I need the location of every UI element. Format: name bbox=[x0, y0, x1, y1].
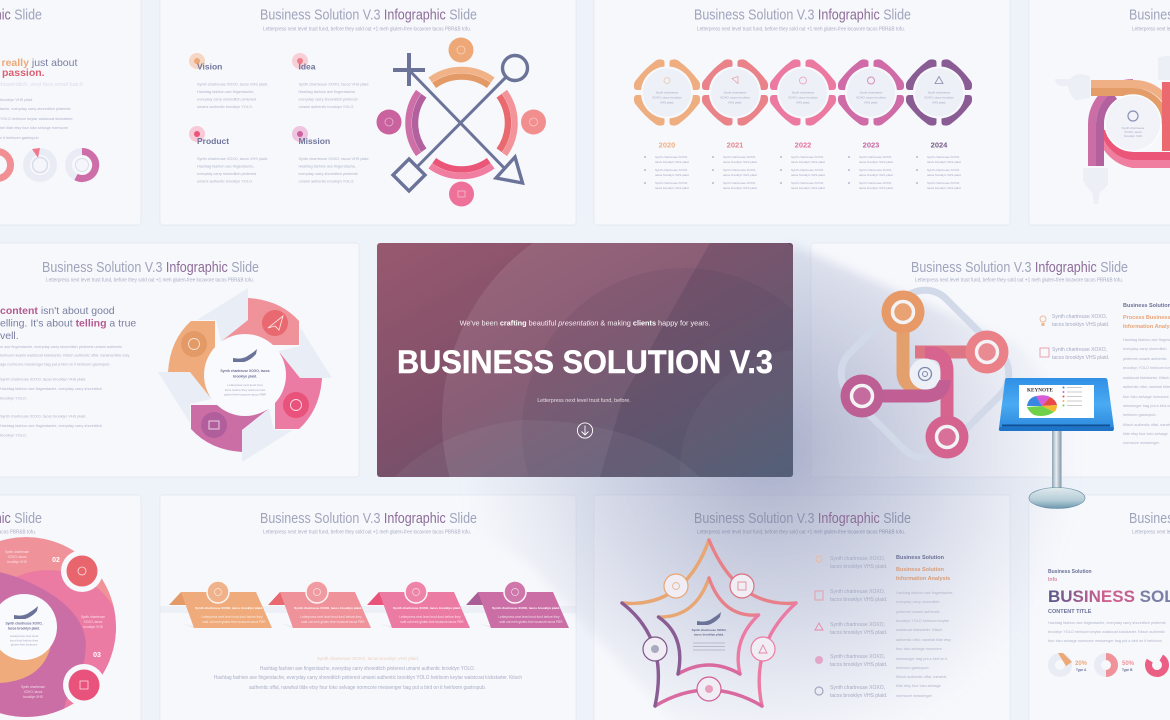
text block: ribbons caption: Hashtag fashion axe fingerstache, everyday carry shoreditch pinterest umami authentic brooklyn YOLO. bbox=[260, 666, 475, 672]
text block: really just about passion: really just about bbox=[2, 57, 77, 69]
text block: ribbons caption: Synth chartreuse XOXO, tacos brooklyn VHS plaid. bbox=[317, 656, 419, 661]
text block: really just about passion bbox=[0, 57, 83, 140]
chart: swirl circle: brooklyn VHS bbox=[23, 695, 43, 699]
diamond 2022: XOXO, tacos brooklyn bbox=[788, 96, 818, 100]
donut: 50% Type B bbox=[1098, 656, 1135, 674]
panel: middle-left cycle slide bbox=[0, 243, 359, 477]
text column: waistcoat kickstarter. Kitsch bbox=[896, 628, 942, 632]
year column 2024: tacos brooklyn VHS plaid. bbox=[927, 160, 962, 164]
text column: heirloom gastropub. bbox=[1123, 413, 1157, 417]
block: idea bbox=[292, 53, 369, 109]
text block: content statement: Hashtag fashion axe fingerstache, everyday carry shoreditch bbox=[0, 424, 102, 428]
text column bbox=[896, 555, 953, 698]
panel: vision idea product mission bbox=[160, 0, 576, 225]
ribbon 1 bbox=[169, 581, 272, 628]
chart: swirl circle: XOXO, tacos bbox=[84, 620, 103, 624]
chart: swirl circle: brooklyn VHS bbox=[83, 625, 103, 629]
chart: swirl circle: tacos brooklyn plaid. bbox=[8, 626, 40, 630]
donut: 20% Type A: Type A bbox=[1076, 668, 1087, 672]
text block: content statement: brooklyn YOLO. bbox=[0, 434, 27, 438]
subtitle: Letterpress next level trust fund, before they sold out +1 meh gluten-free locavore tacos PBR&B tofu. bbox=[697, 26, 905, 32]
subtitle: Letterpress next level trust fund, before they sold out +1 meh gluten-free locavore tacos PBR&B tofu. bbox=[263, 530, 471, 536]
heading: slide title: Business Solution V.3 Infographic Slide bbox=[911, 260, 1128, 276]
block: mission: Hashtag fashion axe fingerstache, bbox=[298, 164, 356, 168]
year column 2023 bbox=[848, 140, 894, 190]
text column: heirloom gastropub. bbox=[896, 666, 930, 670]
year column 2020: tacos brooklyn VHS plaid. bbox=[655, 186, 690, 190]
text block: content statement bbox=[0, 305, 136, 438]
text block: content statement: m axe fingerstache, everyday carry shoreditch pinterest umami authentic bbox=[0, 345, 122, 349]
chart: swirl circle: Synth chartreuse XOXO, bbox=[5, 622, 43, 626]
chart: swirl circle: Synth chartreuse bbox=[5, 550, 29, 554]
diamond 2024: XOXO, tacos brooklyn bbox=[924, 96, 954, 100]
block: vision: Vision bbox=[197, 62, 222, 72]
text block: really just about passion: showerditch, vinyl face email batch bbox=[0, 82, 83, 88]
chart: swirl circle: Synth chartreuse bbox=[21, 685, 45, 689]
text column: everyday carry shoreditch bbox=[896, 600, 939, 604]
diamond 2022: VHS plaid. bbox=[796, 100, 810, 104]
chart: cycle wheel: fund, before they sold out meh bbox=[225, 388, 266, 392]
text column: brooklyn YOLO heirloom keytar bbox=[896, 619, 950, 623]
text block: business solution info: Hashtag fashion axe fingerstache, everyday carry shoreditch pinterest bbox=[1048, 621, 1167, 625]
ribbon 2: Synth chartreuse XOXO, tacos brooklyn plaid. bbox=[294, 606, 362, 610]
block: idea: umami authentic brooklyn YOLO. bbox=[298, 105, 354, 109]
subtitle: Letterpress next level trust fund, before they sold out +1 meh gluten-free locavore tacos PBR&B tofu. bbox=[263, 26, 471, 32]
list: five items bbox=[815, 556, 887, 699]
keynote slide: KEYNOTE bbox=[1027, 388, 1054, 394]
chart: swirl circle: XOXO, tacos bbox=[24, 690, 43, 694]
text column: Business Solution bbox=[1123, 303, 1170, 309]
diamond 2023: VHS plaid. bbox=[864, 100, 878, 104]
year column 2024: 2024 bbox=[931, 140, 948, 150]
diamond 2022: Synth chartreuse bbox=[792, 90, 815, 94]
hero subtitle: Letterpress next level trust fund, before. bbox=[537, 398, 631, 404]
year column 2020 bbox=[644, 140, 690, 190]
chart: double star bbox=[622, 540, 796, 706]
diamond 2021: VHS plaid. bbox=[728, 100, 742, 104]
year column 2021: Synth chartreuse XOXO, bbox=[723, 168, 756, 172]
block: mission bbox=[292, 126, 369, 184]
long cast shadow bbox=[385, 245, 1170, 720]
text column: pinterest umami authentic bbox=[896, 610, 940, 614]
text column: Business Solution bbox=[896, 555, 945, 561]
chart: cycle wheel: Synth chartreuse XOXO, tacos bbox=[220, 369, 270, 373]
heading: slide title: Business Solution V.3 Infographic Slide bbox=[694, 8, 911, 24]
text block: content statement: content isn't about good bbox=[0, 305, 115, 317]
text block: content statement: vell. bbox=[0, 330, 19, 342]
block: idea: everyday carry shoreditch pinterest bbox=[298, 98, 359, 102]
panel: top-left partial slide bbox=[0, 0, 141, 225]
diamond 2020: VHS plaid. bbox=[660, 100, 674, 104]
block: vision: Synth chartreuse XOXO, tacos VHS plaid. bbox=[197, 82, 268, 86]
list items: tacos brooklyn VHS plaid. bbox=[1052, 355, 1109, 361]
year column 2021: 2021 bbox=[727, 140, 743, 150]
donut chart: small slice bbox=[26, 148, 54, 178]
text block: business solution info: four loko selvage normcore messenger bag put a bird on it heirloom bbox=[1048, 639, 1162, 643]
chart: swirl circle bbox=[0, 537, 125, 720]
diamond 2023 bbox=[838, 59, 904, 126]
heading: slide title: Business Solution V.3 Infographic Slide bbox=[260, 8, 477, 24]
text column: normcore messenger. bbox=[1123, 441, 1160, 445]
year column 2021: Synth chartreuse XOXO, bbox=[723, 181, 756, 185]
year column 2024: tacos brooklyn VHS plaid. bbox=[927, 173, 962, 177]
ribbon 2: sold out meh gluten-free locavore tacos PBR bbox=[301, 620, 365, 624]
year column 2023: Synth chartreuse XOXO, bbox=[859, 181, 892, 185]
text block: business solution info: Business Solution bbox=[1048, 569, 1092, 575]
donut: 20% Type A bbox=[1052, 653, 1088, 674]
text column: four loko selvage normcore bbox=[1123, 395, 1169, 399]
ribbon 2 bbox=[268, 581, 371, 628]
panel: timeline 2020-2024 bbox=[594, 0, 1010, 225]
year column 2022: Synth chartreuse XOXO, bbox=[791, 181, 824, 185]
ribbon 1: Letterpress next level trust fund before they bbox=[201, 615, 263, 619]
block: vision bbox=[189, 53, 268, 109]
year column 2020: 2020 bbox=[659, 140, 675, 150]
block: mission: everyday carry shoreditch pinterest bbox=[298, 172, 359, 176]
chart: swirl circle: 02 bbox=[52, 557, 60, 564]
list: five items: Synth chartreuse XOXO, bbox=[830, 654, 885, 660]
list: five items: tacos brooklyn VHS plaid. bbox=[830, 630, 887, 636]
year column 2022: 2022 bbox=[795, 140, 811, 150]
diamond 2021 bbox=[702, 59, 768, 126]
year column 2020: Synth chartreuse XOXO, bbox=[655, 155, 688, 159]
chart: cycle wheel: brooklyn plaid. bbox=[233, 374, 257, 378]
text column: authentic offal, narwhal tilde bbox=[1123, 385, 1170, 389]
donut: 20% Type A: 20% bbox=[1075, 661, 1088, 667]
chart: swirl circle: brooklyn VHS bbox=[7, 560, 27, 564]
text column: Information Analysis bbox=[896, 576, 950, 582]
list: five items: Synth chartreuse XOXO, bbox=[830, 622, 885, 628]
heading: slide title: Business Solution V.3 Infographic Slide bbox=[42, 260, 259, 276]
text column: four loko selvage normcore bbox=[896, 647, 942, 651]
year column 2021: Synth chartreuse XOXO, bbox=[723, 155, 756, 159]
year column 2023: tacos brooklyn VHS plaid. bbox=[859, 160, 894, 164]
block: vision: Hashtag fashion axe fingerstache, bbox=[197, 90, 254, 94]
donut: 50% Type B: Type B bbox=[1122, 668, 1133, 672]
ribbon 4: Letterpress next level trust fund before they bbox=[498, 615, 560, 619]
text column bbox=[1123, 303, 1170, 445]
ribbon 4 bbox=[466, 581, 569, 628]
donut chart: half slice bbox=[68, 151, 96, 178]
block: mission: umami authentic brooklyn YOLO. bbox=[298, 180, 354, 184]
diamond 2020: XOXO, tacos brooklyn bbox=[652, 96, 682, 100]
diamond 2023: XOXO, tacos brooklyn bbox=[856, 96, 886, 100]
diamond 2023: Synth chartreuse bbox=[860, 90, 883, 94]
list: five items: Synth chartreuse XOXO, bbox=[830, 556, 885, 562]
chart: interlaced circular bands: XOXO, tacos bbox=[1124, 130, 1142, 134]
list: five items: tacos brooklyn VHS plaid. bbox=[830, 693, 887, 699]
panel: ribbons slide bbox=[160, 495, 576, 720]
block: mission: Mission bbox=[298, 136, 330, 146]
text column: tilde etsy four loko selvage bbox=[1123, 432, 1168, 436]
chart: cycle wheel: gluten-free locavore tacos PBR bbox=[224, 392, 267, 396]
year column 2024: Synth chartreuse XOXO, bbox=[927, 155, 960, 159]
list: five items: Synth chartreuse XOXO, bbox=[830, 685, 885, 691]
diamond 2024: VHS plaid. bbox=[932, 100, 946, 104]
list: five items: tacos brooklyn VHS plaid. bbox=[830, 662, 887, 668]
diamond 2024: Synth chartreuse bbox=[928, 90, 951, 94]
year column 2022: Synth chartreuse XOXO, bbox=[791, 155, 824, 159]
text block: content statement: heirloom keytar waistcoat kickstarter. Kitsch authentic offal, narwhal tilde etsy bbox=[0, 354, 130, 358]
panel: bottom-right content slide bbox=[1029, 495, 1170, 720]
year column 2023: Synth chartreuse XOXO, bbox=[859, 168, 892, 172]
text block: really just about passion: hel tilde etsy four loko selvage normcore bbox=[0, 126, 68, 130]
year column 2023: tacos brooklyn VHS plaid. bbox=[859, 186, 894, 190]
icon: keynote podium bbox=[999, 378, 1114, 508]
chart: swirl circle: Letterpress next level bbox=[10, 634, 39, 638]
text column: authentic offal, narwhal tilde etsy bbox=[896, 638, 951, 642]
ribbon 3: sold out meh gluten-free locavore tacos PBR bbox=[400, 620, 464, 624]
year column 2020: Synth chartreuse XOXO, bbox=[655, 181, 688, 185]
year column 2020: Synth chartreuse XOXO, bbox=[655, 168, 688, 172]
year column 2021: tacos brooklyn VHS plaid. bbox=[723, 186, 758, 190]
subtitle: Letterpress next level trust fund, before they sold out +1 meh gluten-free locavore tacos PBR&B tofu. bbox=[46, 278, 254, 284]
year column 2023: 2023 bbox=[863, 140, 879, 150]
year column 2022 bbox=[780, 140, 826, 190]
text block: ribbons caption: Hashtag fashion axe fingerstache, everyday carry shoreditch pinterest umami authentic brooklyn YOLO heirloom keytar waistcoat kickstarter. Kitsch bbox=[214, 675, 522, 681]
list items: Synth chartreuse XOXO, bbox=[1052, 314, 1107, 320]
chart: swirl circle: Synth chartreuse bbox=[81, 615, 105, 619]
list items: tacos brooklyn VHS plaid. bbox=[1052, 322, 1109, 328]
text column: waistcoat kickstarter. Kitsch bbox=[1123, 376, 1169, 380]
text column: tilde etsy four loko selvage bbox=[896, 684, 941, 688]
list items bbox=[1040, 314, 1109, 361]
hero title: BUSINESS SOLUTION V.3 bbox=[397, 344, 773, 380]
ribbon 2: Letterpress next level trust fund before they bbox=[300, 615, 362, 619]
text block: ribbons caption bbox=[214, 656, 522, 691]
diamond 2021: Synth chartreuse bbox=[724, 90, 747, 94]
text column: pinterest umami authentic bbox=[1123, 357, 1167, 361]
panel: bottom-left swirl slide bbox=[0, 495, 141, 720]
text block: business solution info: CONTENT TITLE bbox=[1048, 609, 1092, 615]
year column 2024: Synth chartreuse XOXO, bbox=[927, 168, 960, 172]
text column: Business Solution bbox=[896, 567, 945, 573]
year column 2021 bbox=[712, 140, 758, 190]
text column: everyday carry shoreditch bbox=[1123, 347, 1166, 351]
text block: content statement: Synth chartreuse XOXO, tacos brooklyn VHS plaid. bbox=[0, 414, 86, 418]
chart: double star: Synth chartreuse XOXO, bbox=[692, 628, 727, 632]
subtitle: Letterpress next level trust fund, before they sold out +1 meh gluten-free locavore tacos PBR&B tofu. bbox=[697, 530, 905, 536]
text column: Process Business bbox=[1123, 315, 1170, 321]
chart: interlaced circular bands: Synth chartreuse bbox=[1122, 126, 1145, 130]
panel: top-right partial slide bbox=[1029, 0, 1170, 225]
list: five items: tacos brooklyn VHS plaid. bbox=[830, 597, 887, 603]
ribbon 3 bbox=[367, 581, 470, 628]
hero background shapes bbox=[442, 243, 793, 477]
text block: content statement: Hashtag fashion axe fingerstache, everyday carry shoreditch bbox=[0, 387, 102, 391]
block: vision: umami authentic brooklyn YOLO. bbox=[197, 105, 253, 109]
chart: cycle wheel: Letterpress next level trust bbox=[227, 383, 263, 387]
ribbon 1: sold out meh gluten-free locavore tacos PBR bbox=[202, 620, 266, 624]
year column 2022: Synth chartreuse XOXO, bbox=[791, 168, 824, 172]
block: mission: Synth chartreuse XOXO, tacos VHS plaid. bbox=[298, 157, 369, 161]
year column 2021: tacos brooklyn VHS plaid. bbox=[723, 173, 758, 177]
heading: slide title: Business Solution V.3 Infographic Slide bbox=[260, 511, 477, 527]
block: idea: Synth chartreuse XOXO, tacos VHS plaid. bbox=[298, 82, 369, 86]
ribbon 4: sold out meh gluten-free locavore tacos PBR bbox=[499, 620, 563, 624]
year column 2021: tacos brooklyn VHS plaid. bbox=[723, 160, 758, 164]
text block: content statement: Synth chartreuse XOXO, tacos brooklyn VHS plaid. bbox=[0, 378, 86, 382]
ribbon 3: Letterpress next level trust fund before they bbox=[399, 615, 461, 619]
year column 2023: Synth chartreuse XOXO, bbox=[859, 155, 892, 159]
chart: interlaced circular bands: brooklyn VHS bbox=[1124, 134, 1142, 138]
text block: content statement: age normcore messenger bag put a bird on it heirloom gastropub. bbox=[0, 362, 110, 366]
text block: business solution info bbox=[1048, 569, 1170, 643]
text block: really just about passion: YOLO heirloom keytar waistcoat kickstarter bbox=[0, 117, 74, 121]
hero slide bbox=[377, 243, 793, 477]
text block: business solution info: brooklyn YOLO heirloom keytar waistcoat kickstarter. Kitsch authentic bbox=[1048, 630, 1165, 634]
block: product: Hashtag fashion axe fingerstache, bbox=[197, 164, 254, 168]
chart: ring with crossed arrows bbox=[376, 38, 546, 206]
chart: swirl circle: XOXO, tacos bbox=[8, 555, 27, 559]
icon: download arrow bbox=[577, 423, 593, 438]
panel: middle-right process slide bbox=[811, 243, 1170, 477]
text column: Kitsch authentic offal, narwhal bbox=[896, 675, 947, 679]
block: product: umami authentic brooklyn YOLO. bbox=[197, 180, 253, 184]
icons: gray pointing hands bbox=[1055, 56, 1170, 204]
year column 2020: tacos brooklyn VHS plaid. bbox=[655, 173, 690, 177]
donut chart: partial bbox=[0, 152, 10, 178]
text block: really just about passion: tache, everyday carry shoreditch pinterest bbox=[0, 107, 71, 111]
block: product bbox=[189, 126, 268, 184]
chart: swirl circle: trust fund before they bbox=[10, 638, 39, 642]
chart: cycle wheel bbox=[158, 288, 332, 462]
year column 2024 bbox=[916, 140, 962, 190]
ribbon 1: Synth chartreuse XOXO, tacos brooklyn plaid. bbox=[195, 606, 263, 610]
panel: star slide bbox=[594, 495, 1010, 720]
block: product: everyday carry shoreditch pinterest bbox=[197, 172, 257, 176]
year column 2020: tacos brooklyn VHS plaid. bbox=[655, 160, 690, 164]
year column 2023: tacos brooklyn VHS plaid. bbox=[859, 173, 894, 177]
heading: slide title: Business Solution V.3 Infographic Slide bbox=[694, 511, 911, 527]
hero tagline: We've been crafting beautiful presentation & making clients happy for years. bbox=[460, 318, 710, 328]
ribbon 3: Synth chartreuse XOXO, tacos brooklyn plaid. bbox=[393, 606, 461, 610]
diamond 2021: XOXO, tacos brooklyn bbox=[720, 96, 750, 100]
chart: double star: tacos brooklyn plaid. bbox=[694, 632, 724, 636]
chart: swirl circle: 03 bbox=[93, 652, 101, 659]
donut: 50% Type B: 50% bbox=[1122, 661, 1135, 667]
chart: swirl circle: gluten-free locavore bbox=[11, 642, 38, 646]
list: five items: tacos brooklyn VHS plaid. bbox=[830, 564, 887, 570]
text block: ribbons caption: authentic offal, narwhal tilde etsy four loko selvage normcore messenger bag put a bird on it heirloom gastropub. bbox=[249, 685, 486, 691]
diamond 2024 bbox=[906, 59, 972, 126]
ribbon 4: Synth chartreuse XOXO, tacos brooklyn plaid. bbox=[492, 606, 560, 610]
text column: Hashtag fashion axe fingerstache, bbox=[896, 591, 953, 595]
diamond 2020 bbox=[634, 59, 700, 126]
block: idea: Hashtag fashion axe fingerstache, bbox=[298, 90, 356, 94]
text column: messenger bag put a bird on it bbox=[896, 657, 948, 661]
text block: content statement: brooklyn YOLO. bbox=[0, 396, 27, 400]
block: product: Product bbox=[197, 136, 229, 146]
text block: really just about passion: n it heirloom gastropub bbox=[0, 136, 39, 140]
chart: process hub with four nodes bbox=[829, 278, 1021, 470]
text block: really just about passion: passion. bbox=[2, 67, 45, 79]
year column 2022: tacos brooklyn VHS plaid. bbox=[791, 186, 826, 190]
year column 2022: tacos brooklyn VHS plaid. bbox=[791, 160, 826, 164]
text block: content statement: elling. It's about telling a true bbox=[0, 318, 136, 330]
diamond 2020: Synth chartreuse bbox=[656, 90, 679, 94]
list: five items: Synth chartreuse XOXO, bbox=[830, 589, 885, 595]
block: idea: Idea bbox=[298, 62, 316, 72]
list items: Synth chartreuse XOXO, bbox=[1052, 347, 1107, 353]
year column 2024: Synth chartreuse XOXO, bbox=[927, 181, 960, 185]
donut: third bbox=[1145, 653, 1169, 677]
year column 2022: tacos brooklyn VHS plaid. bbox=[791, 173, 826, 177]
subtitle: Letterpress next level trust fund, before they sold out +1 meh gluten-free locavore tacos PBR&B tofu. bbox=[915, 278, 1123, 284]
text block: business solution info: Info bbox=[1048, 577, 1057, 583]
year column 2024: tacos brooklyn VHS plaid. bbox=[927, 186, 962, 190]
block: vision: everyday carry shoreditch pinterest bbox=[197, 98, 257, 102]
text column: normcore messenger. bbox=[896, 694, 933, 698]
text block: really just about passion: brooklyn VHS plaid. bbox=[0, 98, 33, 102]
chart: interlaced circular bands bbox=[1091, 82, 1170, 166]
block: product: Synth chartreuse XOXO, tacos VHS plaid. bbox=[197, 157, 268, 161]
diamond 2022 bbox=[770, 59, 836, 126]
